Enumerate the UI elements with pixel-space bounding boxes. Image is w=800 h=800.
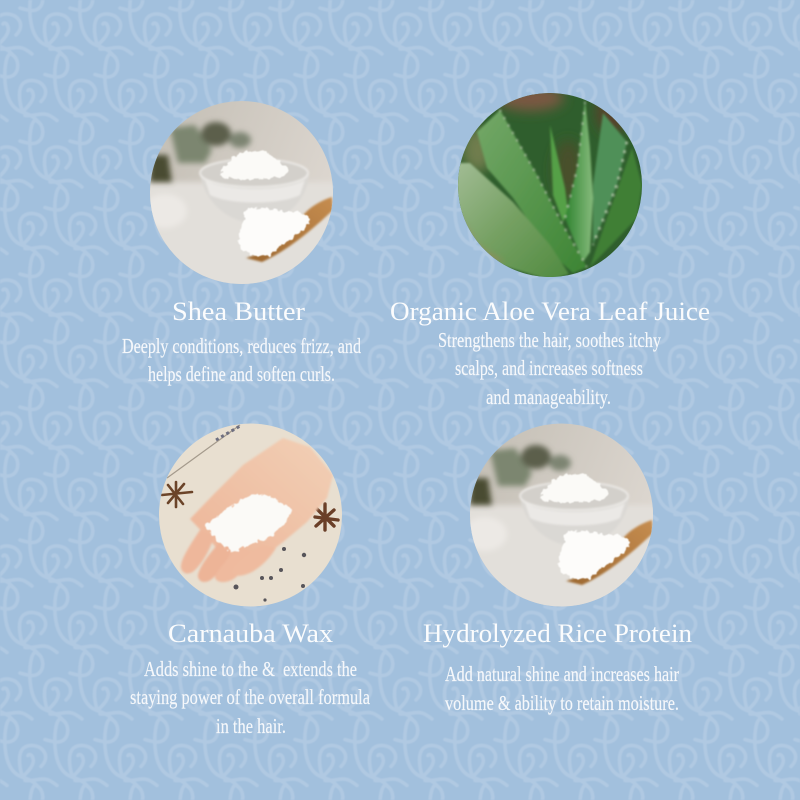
text: carnauba wax description: staying power of the overall formula (130, 685, 371, 709)
heading: hydrolyzed rice protein: Hydrolyzed Rice Protein (423, 619, 692, 648)
text: aloe vera description: Strengthens the hair, soothes itchy (438, 328, 661, 352)
hand (181, 438, 333, 582)
text: carnauba wax description: Adds shine to the & extends the (144, 657, 357, 681)
panel: carnauba wax (130, 423, 371, 738)
text: shea butter description (122, 334, 361, 386)
text: carnauba wax description (130, 657, 371, 738)
text: shea butter description: Deeply conditions, reduces frizz, and (122, 334, 361, 358)
text: rice protein description (445, 662, 679, 715)
photo: shea butter in bowl with wooden spoon (150, 101, 333, 284)
panel: aloe vera (390, 85, 710, 409)
photo: hand holding white wax flakes (158, 423, 343, 608)
text: aloe vera description (438, 328, 661, 409)
heading: shea butter: Shea Butter (172, 297, 305, 326)
icon: star anise left (162, 482, 192, 507)
panel: hydrolyzed rice protein (423, 423, 692, 715)
panel: shea butter (122, 100, 361, 386)
photo: aloe vera plant (452, 85, 642, 280)
text: rice protein description: Add natural shine and increases hair (445, 662, 679, 686)
photo: white cream in bowl with wooden spoon (470, 424, 653, 606)
text: carnauba wax description: in the hair. (216, 714, 286, 738)
text: shea butter description: helps define and soften curls. (148, 362, 335, 386)
icon: star anise right (315, 504, 338, 530)
text: aloe vera description: and manageability. (486, 385, 611, 409)
heading: carnauba wax: Carnauba Wax (168, 619, 333, 648)
heading: organic aloe vera leaf juice: Organic Aloe Vera Leaf Juice (390, 297, 710, 326)
text: aloe vera description: scalps, and increases softness (455, 356, 643, 380)
text: rice protein description: volume & ability to retain moisture. (445, 691, 679, 715)
